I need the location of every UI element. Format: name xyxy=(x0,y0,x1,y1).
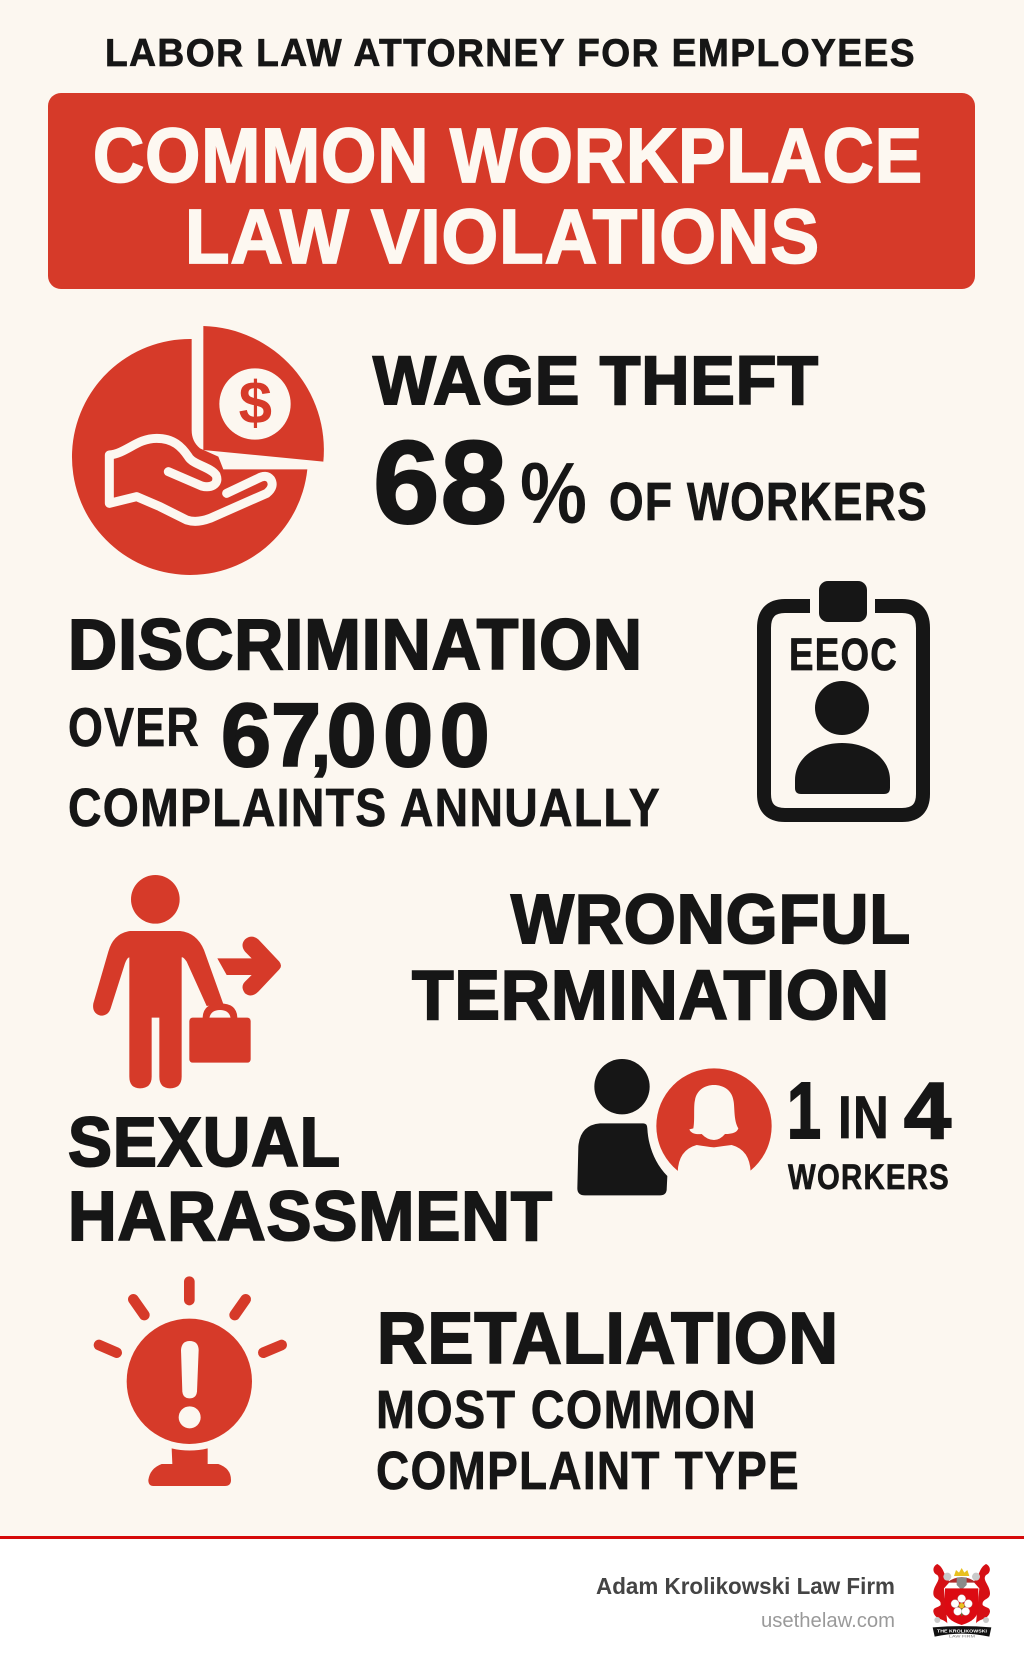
heading: sexual harassment: SEXUAL xyxy=(68,1103,341,1181)
icon: EEOC clipboard badge xyxy=(764,581,923,815)
panel: discrimination xyxy=(68,581,923,838)
title: LABOR LAW ATTORNEY FOR EMPLOYEES xyxy=(105,32,916,75)
firm name: Adam Krolikowski Law Firm xyxy=(596,1573,895,1599)
footer xyxy=(0,1536,1024,1666)
stat: 1 in 4: 1 xyxy=(787,1066,821,1155)
panel: sexual harassment xyxy=(68,1059,952,1255)
icon: EEOC clipboard badge: EEOC xyxy=(789,629,898,680)
heading: wage theft: WAGE THEFT xyxy=(373,342,819,419)
heading: wrongful termination: WRONGFUL xyxy=(511,880,911,958)
icon: person leaving with briefcase and arrow xyxy=(93,875,281,1088)
panel: wrongful termination xyxy=(93,875,911,1088)
icon: alarm with exclamation mark xyxy=(99,1282,282,1486)
website: usethelaw.com xyxy=(761,1610,895,1632)
banner heading: COMMON WORKPLACE xyxy=(93,113,923,199)
stat: 1 in 4: 4 xyxy=(904,1066,952,1155)
label: workers: WORKERS xyxy=(788,1158,950,1197)
text: most common complaint type: MOST COMMON xyxy=(376,1380,757,1440)
label: over: OVER xyxy=(68,696,200,758)
stat: 68: 68 xyxy=(373,417,508,549)
banner heading xyxy=(48,93,975,289)
heading: sexual harassment xyxy=(68,1103,553,1255)
text: most common complaint type xyxy=(376,1380,800,1501)
icon: pie chart with hand and dollar coin: $ xyxy=(239,369,272,436)
heading: retaliation: RETALIATION xyxy=(377,1299,839,1379)
stat: percent sign: % xyxy=(520,446,587,542)
stat label: of workers: OF WORKERS xyxy=(609,472,928,532)
banner heading: LAW VIOLATIONS xyxy=(185,194,820,280)
heading: sexual harassment: HARASSMENT xyxy=(68,1177,553,1255)
logo: law firm crest: LAW FIRM xyxy=(949,1635,975,1639)
logo: law firm crest xyxy=(933,1564,991,1639)
icon: two people xyxy=(577,1059,772,1195)
stat: 67,000: 67,000 xyxy=(221,686,496,786)
text: most common complaint type: COMPLAINT TYPE xyxy=(376,1441,800,1501)
heading: wrongful termination xyxy=(412,880,911,1034)
heading: wrongful termination: TERMINATION xyxy=(412,956,890,1034)
stat: 1 in 4: IN xyxy=(838,1084,890,1151)
stat: 1 in 4 xyxy=(787,1066,952,1155)
panel: wage theft xyxy=(72,326,928,575)
logo: law firm crest: THE KROLIKOWSKI xyxy=(937,1628,988,1634)
panel: retaliation xyxy=(99,1282,839,1501)
icon: pie chart with hand and dollar coin xyxy=(72,326,324,575)
heading: discrimination: DISCRIMINATION xyxy=(68,606,643,685)
label: complaints annually: COMPLAINTS ANNUALLY xyxy=(68,778,661,838)
